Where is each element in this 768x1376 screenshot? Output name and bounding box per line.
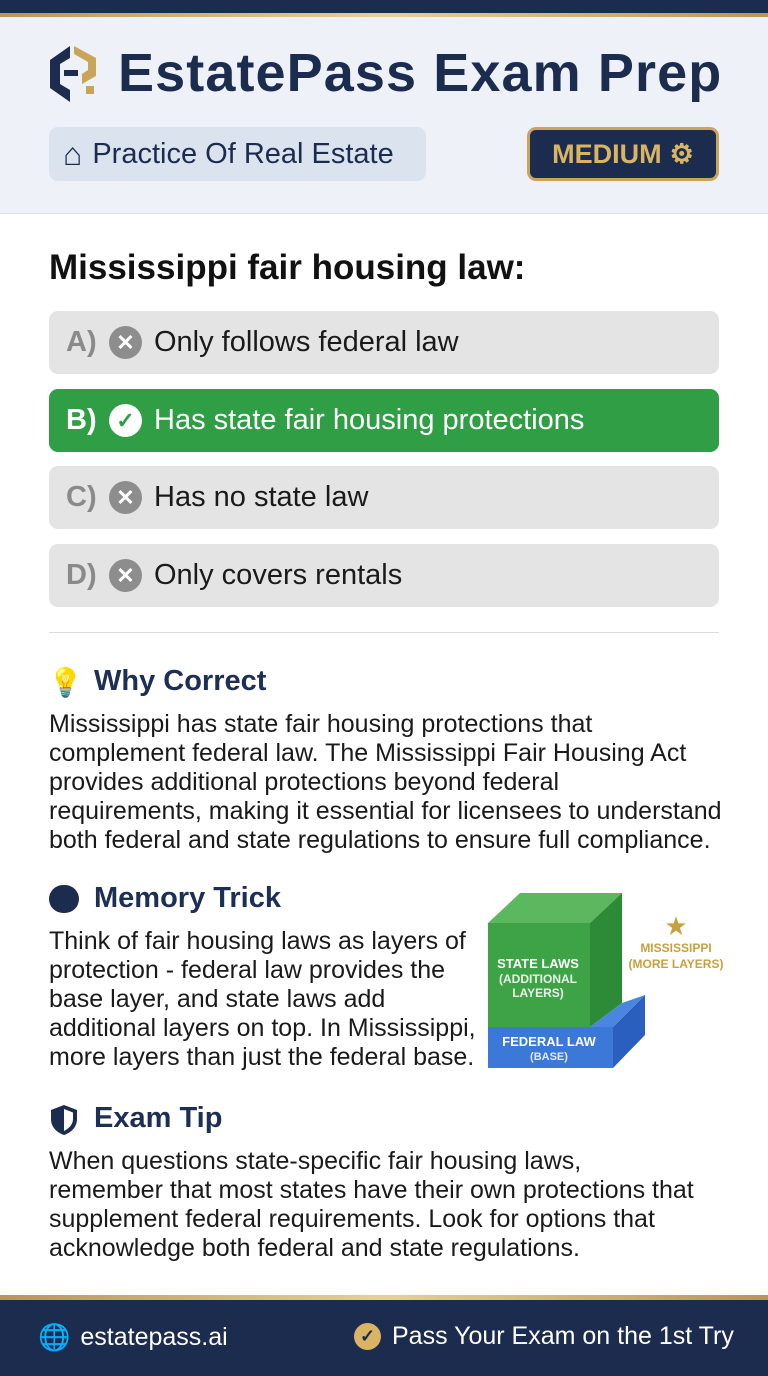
diagram: layers xyxy=(488,893,723,1068)
option B correct: ✓ xyxy=(116,408,135,432)
question: Mississippi fair housing law: xyxy=(49,248,525,287)
text: memory trick: additional layers on top. In Mississippi, xyxy=(49,1014,476,1042)
option D xyxy=(49,544,719,607)
text: why correct: complement federal law. The Mississippi Fair Housing Act xyxy=(49,739,686,767)
option A xyxy=(49,311,719,374)
option D: D) xyxy=(66,559,97,591)
footer: website: 🌐 xyxy=(38,1322,70,1352)
category pill: Practice Of Real Estate xyxy=(92,138,394,170)
footer: slogan: ✓ xyxy=(360,1326,375,1346)
text: memory trick: base layer, and state laws add xyxy=(49,985,385,1013)
option C: ✕ xyxy=(116,484,135,510)
option A: ✕ xyxy=(116,330,135,354)
heading: memory trick: Memory Trick xyxy=(94,882,281,914)
footer: website: estatepass.ai xyxy=(80,1323,228,1351)
diagram: layers: FEDERAL LAW xyxy=(502,1034,597,1049)
difficulty badge: MEDIUM xyxy=(552,138,662,168)
diagram: layers: STATE LAWS xyxy=(497,956,579,971)
heading: exam tip: Exam Tip xyxy=(94,1102,222,1134)
footer xyxy=(0,1295,768,1376)
text: exam tip xyxy=(49,1147,694,1262)
footer: slogan: Pass Your Exam on the 1st Try xyxy=(392,1322,734,1350)
diagram: layers: (ADDITIONAL xyxy=(499,972,577,986)
category pill: ⌂ xyxy=(63,136,82,172)
option A: Only follows federal law xyxy=(154,326,459,358)
difficulty badge xyxy=(527,127,719,181)
header band xyxy=(0,0,768,214)
text: why correct: Mississippi has state fair housing protections that xyxy=(49,710,592,738)
icon: brain xyxy=(49,885,79,913)
option C xyxy=(49,466,719,529)
text: memory trick: more layers than just the federal base. xyxy=(49,1043,474,1071)
diagram: layers: (BASE) xyxy=(530,1051,568,1063)
diagram: layers: LAYERS) xyxy=(512,986,564,1000)
option B correct xyxy=(49,389,719,452)
diagram: layers: (MORE LAYERS) xyxy=(629,957,723,971)
text: why correct: requirements, making it essential for licensees to understand xyxy=(49,797,722,825)
text: why correct xyxy=(49,710,722,854)
option D: Only covers rentals xyxy=(154,559,402,591)
option C: Has no state law xyxy=(154,481,368,513)
text: exam tip: When questions state-specific fair housing laws, xyxy=(49,1147,581,1175)
text: exam tip: acknowledge both federal and state regulations. xyxy=(49,1234,580,1262)
difficulty badge: ⚙ xyxy=(670,138,694,168)
icon: bulb: 💡 xyxy=(48,667,83,698)
text: memory trick: Think of fair housing laws as layers of xyxy=(49,927,466,955)
heading: why correct: Why Correct xyxy=(94,665,266,697)
text: why correct: provides additional protections beyond federal xyxy=(49,768,559,796)
category pill xyxy=(49,127,426,181)
diagram: layers: MISSISSIPPI xyxy=(640,941,712,955)
title: EstatePass Exam Prep xyxy=(118,43,722,103)
text: why correct: both federal and state regulations to ensure full compliance. xyxy=(49,826,711,854)
option B correct: B) xyxy=(66,404,97,436)
option D: ✕ xyxy=(116,562,135,588)
icon: shield xyxy=(51,1105,77,1135)
option C: C) xyxy=(66,481,97,513)
text: memory trick: protection - federal law provides the xyxy=(49,956,445,984)
text: exam tip: remember that most states have their own protections that xyxy=(49,1176,694,1204)
text: memory trick xyxy=(49,927,476,1071)
text: exam tip: supplement federal requirements. Look for options that xyxy=(49,1205,655,1233)
option B correct: Has state fair housing protections xyxy=(154,404,584,436)
diagram: layers: ★ xyxy=(664,911,688,941)
logo icon xyxy=(50,46,96,102)
option A: A) xyxy=(66,326,97,358)
